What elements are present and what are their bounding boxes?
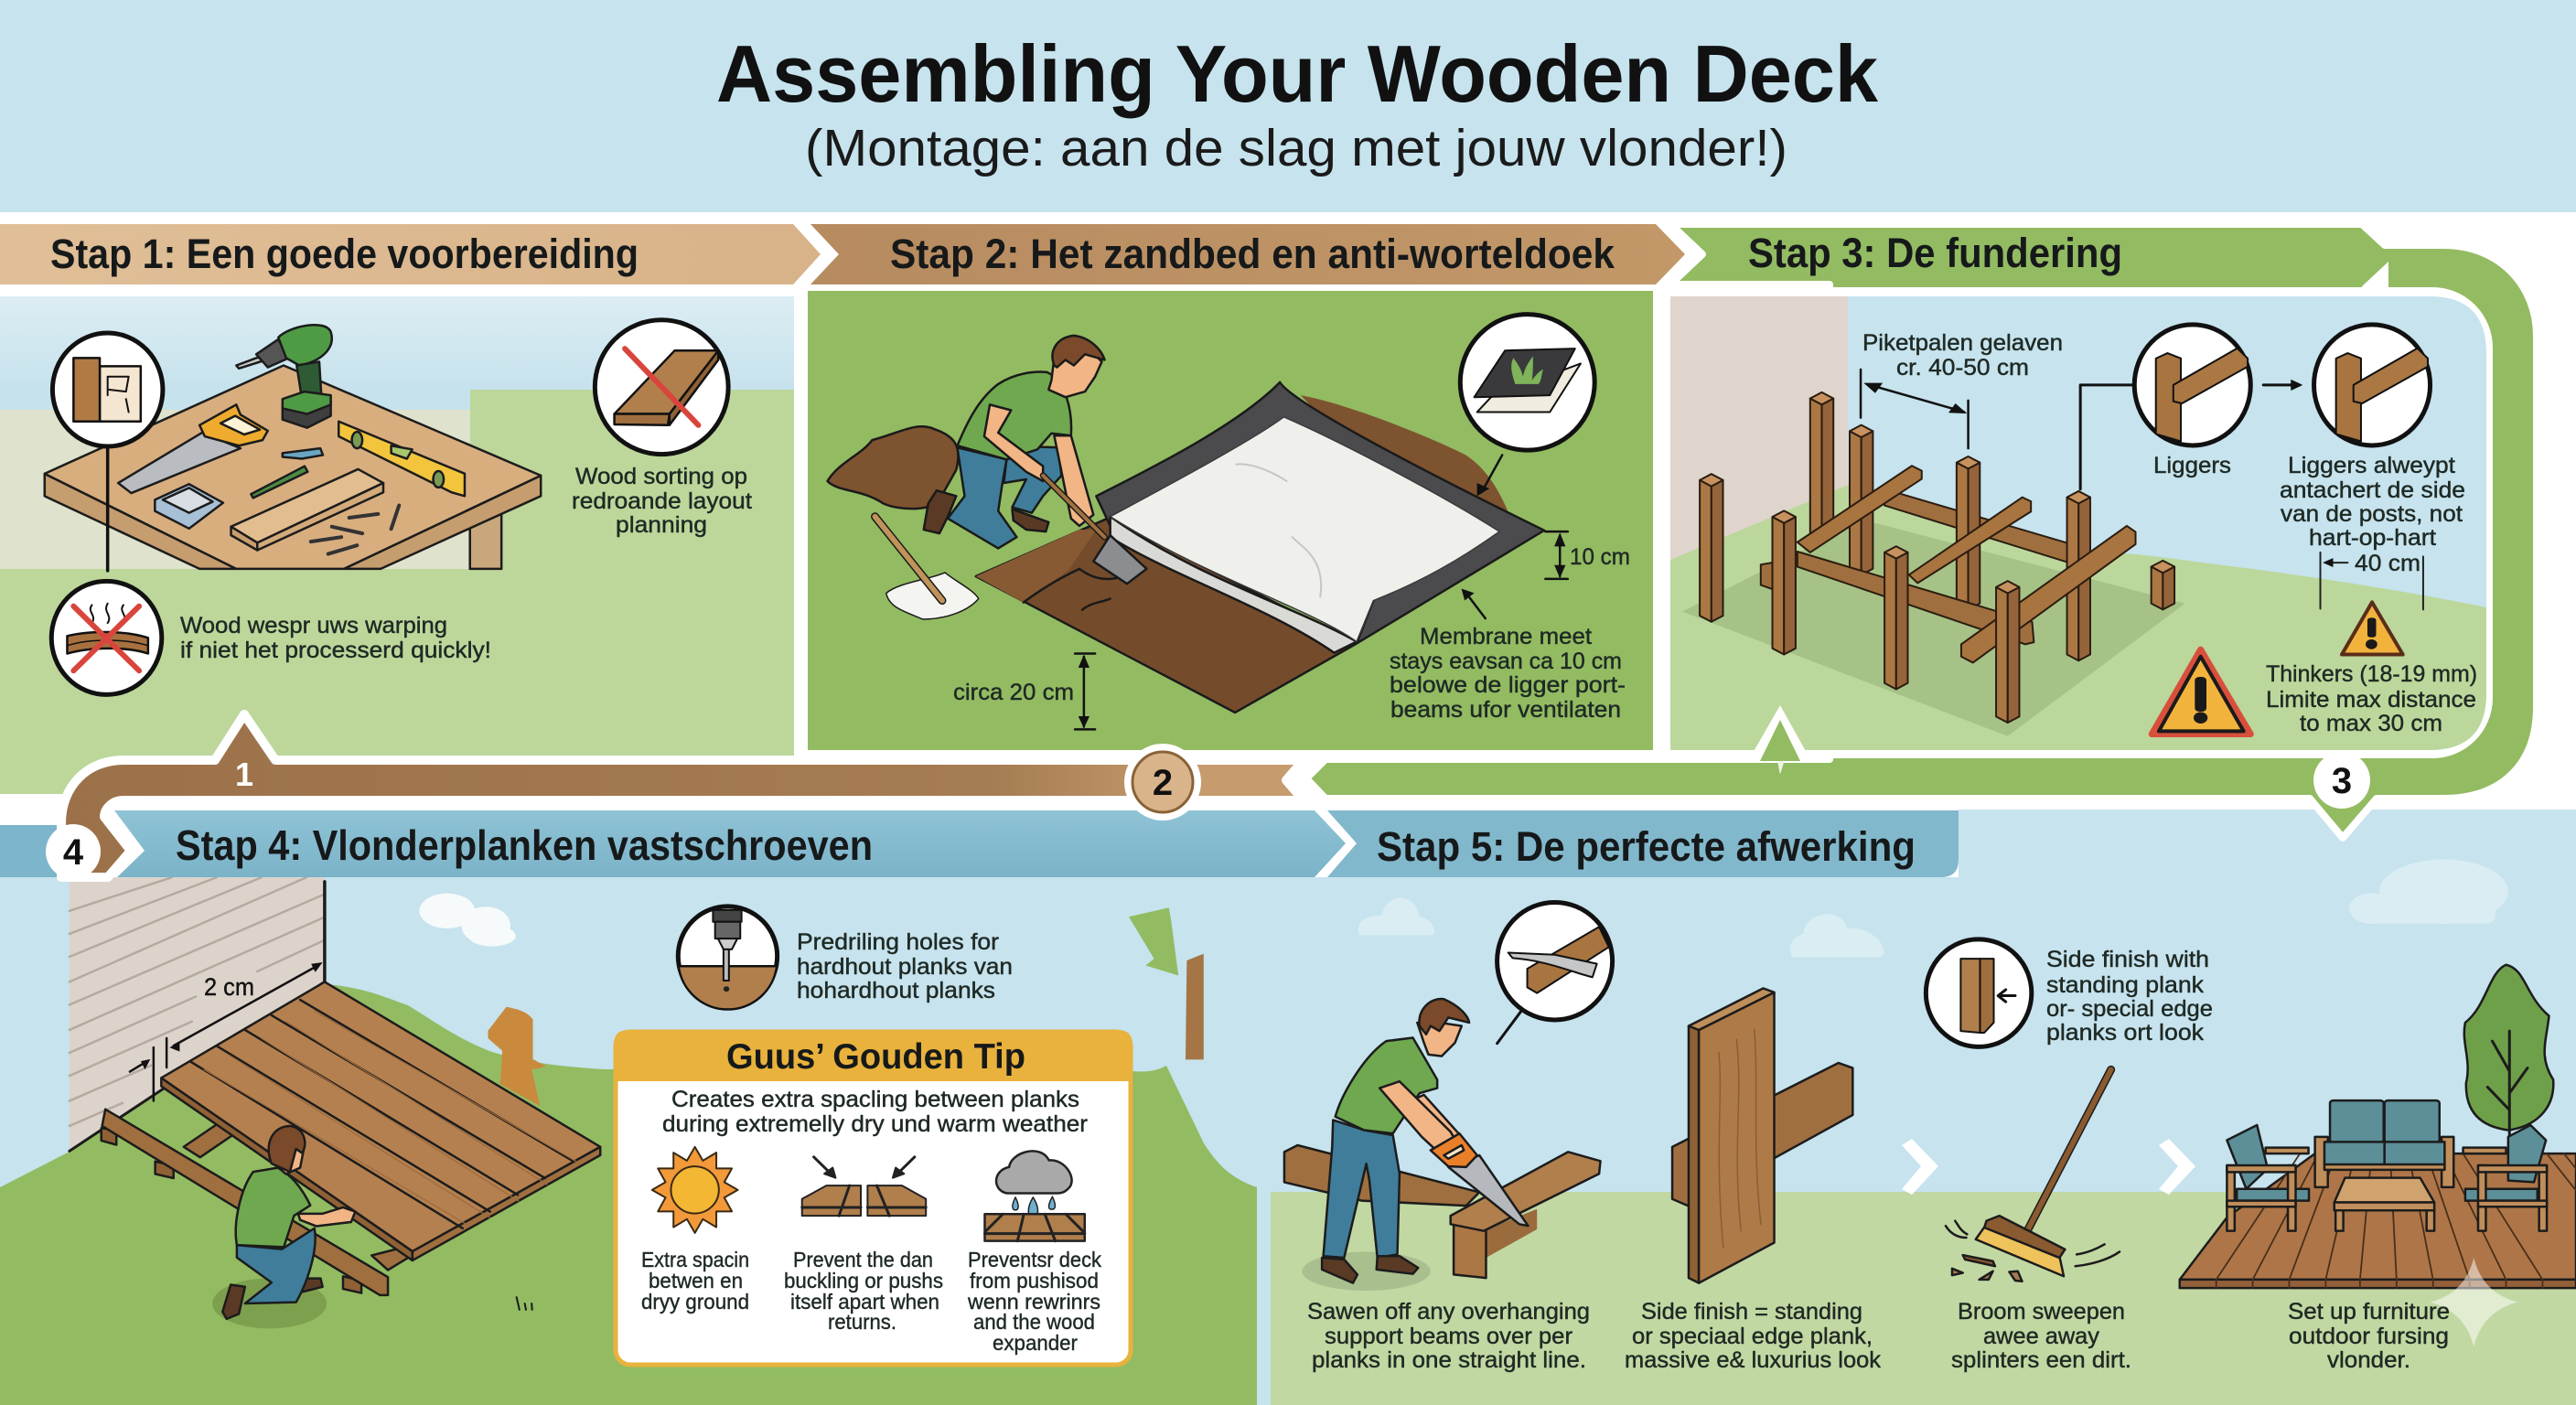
banner: step 1: Stap 1: Een goede voorbereiding — [50, 231, 639, 277]
label: thinkers note — [2266, 661, 2477, 736]
label: circa 20 cm: circa 20 cm — [953, 680, 1074, 705]
column text: sun: Extra spacin — [641, 1248, 749, 1271]
drill — [236, 325, 332, 428]
label: beams side attachment: van de posts, not — [2281, 501, 2463, 527]
banner: step 2: Stap 2: Het zandbed en anti-worteldoek — [890, 231, 1615, 277]
label: sawing: support beams over per — [1325, 1324, 1572, 1349]
label: thinkers note: to max 30 cm — [2300, 711, 2442, 736]
label: warping warning — [180, 613, 491, 663]
label: membrane note: beams ufor ventilaten — [1390, 697, 1621, 723]
label: 2 cm: 2 cm — [204, 973, 254, 1001]
column text: rain: and the wood — [973, 1310, 1095, 1334]
icon: crossed-out plank — [595, 320, 728, 455]
icon: large warning triangle — [2152, 649, 2250, 735]
icons: beam attachment details — [2080, 325, 2431, 489]
label: beams side attachment — [2280, 453, 2465, 576]
house wall — [70, 877, 325, 1151]
number badge 4: 4 — [63, 832, 84, 873]
icon: saw cut detail — [1497, 902, 1613, 1044]
cloud — [419, 894, 516, 947]
banner: step 5: Stap 5: De perfecte afwerking — [1377, 823, 1916, 870]
label: beams side attachment: hart-op-hart — [2309, 525, 2436, 551]
joists — [184, 1121, 237, 1157]
screws — [311, 506, 399, 554]
label: beams side attachment: Liggers alweypt — [2288, 453, 2455, 478]
wood strip — [231, 469, 383, 542]
column text: planks — [784, 1248, 943, 1334]
right chair — [2463, 1125, 2547, 1231]
label: wood sorting: planning — [616, 512, 707, 538]
post — [1700, 474, 1723, 622]
number badge 3: 3 — [2332, 761, 2352, 801]
icon: sun — [652, 1147, 737, 1233]
icon: small warning triangle — [2342, 602, 2403, 655]
column text: sun: dryy ground — [641, 1290, 749, 1314]
label: post spacing: Piketpalen gelaven — [1862, 330, 2063, 356]
label: 10 cm: 10 cm — [1570, 544, 1630, 570]
banner: step 1 — [0, 224, 821, 284]
dimension: post spacing — [1861, 370, 1969, 448]
banner: step 4 — [114, 810, 1346, 877]
label: warping warning: if niet het processerd quickly! — [180, 638, 491, 663]
label: broom: Broom sweepen — [1958, 1299, 2125, 1325]
column text: planks: Prevent the dan — [793, 1248, 933, 1271]
saw — [118, 404, 268, 493]
banner and connector: step 3 green loop — [1306, 224, 2537, 838]
icon: side finish — [1926, 939, 2032, 1046]
label: furniture — [2288, 1299, 2450, 1373]
number badge 2: 2 — [1153, 763, 1173, 803]
label: furniture: outdoor fursing — [2289, 1324, 2449, 1349]
label: membrane note: belowe de ligger port- — [1390, 672, 1626, 698]
background tree fragment — [1129, 907, 1204, 1059]
label: thinkers note: Thinkers (18-19 mm) — [2266, 661, 2477, 687]
label: thinkers note: Limite max distance — [2266, 687, 2476, 713]
sparkle decoration — [2430, 1258, 2517, 1346]
panel: step 1 preparation — [0, 296, 794, 794]
panel: step 3 foundation — [1670, 296, 2486, 750]
dimension: 40 cm — [2321, 552, 2423, 609]
title — [716, 28, 1879, 177]
left chair — [2227, 1125, 2309, 1231]
card intro: during extremelly dry und warm weather — [662, 1111, 1088, 1137]
label: wood sorting: Wood sorting op — [575, 464, 747, 489]
label: warping warning: Wood wespr uws warping — [180, 613, 447, 638]
label: side finish look: massive e& luxurius look — [1625, 1347, 1881, 1373]
up arrow on green connector — [1748, 705, 1811, 773]
subtitle: (Montage: aan de slag met jouw vlonder!) — [805, 119, 1787, 177]
worker — [212, 1126, 355, 1328]
label: side finish look — [1625, 1299, 1881, 1373]
column text: planks: buckling or pushs — [784, 1269, 943, 1292]
label: post spacing — [1862, 330, 2063, 381]
label: predrilling: hohardhout planks — [797, 978, 995, 1003]
icon: planks pushing together — [802, 1157, 926, 1216]
number badge 3 — [2313, 752, 2370, 809]
icon: rain on deck — [984, 1151, 1085, 1241]
card intro — [662, 1087, 1088, 1137]
illustration: kneeling worker with shovel — [827, 336, 1146, 619]
label: sawing: Sawen off any overhanging — [1307, 1299, 1590, 1325]
label: liggers: Liggers — [2153, 453, 2231, 478]
column text: rain: from pushisod — [970, 1269, 1099, 1292]
label: beams side attachment: 40 cm — [2355, 551, 2420, 576]
label: beams side attachment: antachert de side — [2280, 477, 2465, 503]
label: side finish: standing plank — [2046, 972, 2205, 998]
icon: warped wood warning — [51, 581, 162, 694]
label: side finish: planks ort look — [2046, 1020, 2205, 1046]
label: predrilling — [797, 929, 1013, 1003]
icon: predrilling — [678, 906, 778, 1010]
illustration: edge plank on beam — [1672, 988, 1852, 1283]
card intro: Creates extra spacling between planks — [671, 1087, 1079, 1112]
label: membrane note: Membrane meet — [1420, 624, 1592, 649]
label: side finish look: Side finish = standing — [1641, 1299, 1862, 1325]
illustration: posts and beams frame — [1682, 392, 2185, 736]
card heading: Guus’ Gouden Tip — [726, 1037, 1025, 1077]
column text: planks: returns. — [828, 1310, 896, 1334]
sofa — [2315, 1100, 2453, 1187]
dimension: 2 cm gap — [130, 962, 323, 1101]
number badge 4 — [46, 824, 101, 879]
label: predrilling: Predriling holes for — [797, 929, 999, 955]
label: side finish look: or speciaal edge plank, — [1632, 1324, 1873, 1349]
label: furniture: Set up furniture — [2288, 1299, 2450, 1325]
lawn — [0, 984, 1257, 1405]
panel: step 2 sand bed — [808, 291, 1653, 750]
icon: anti-root membrane — [1460, 315, 1594, 450]
deck surface — [2180, 1153, 2576, 1280]
label: broom: awee away — [1983, 1324, 2100, 1349]
label: side finish: Side finish with — [2046, 947, 2209, 972]
column text: sun — [641, 1248, 749, 1314]
label: side finish: or- special edge — [2046, 996, 2213, 1022]
label: broom — [1951, 1299, 2131, 1373]
dimension arrows — [1075, 455, 1568, 729]
clouds — [1358, 859, 2508, 957]
callout: golden tip card — [614, 1030, 1132, 1365]
icon: sorting wood and layout plan — [52, 333, 163, 571]
panel: step 4 decking — [0, 877, 1257, 1405]
column text: rain — [967, 1248, 1101, 1355]
banner: step 5 — [1327, 810, 1959, 877]
column text: sun: betwen en — [649, 1269, 743, 1292]
step separator chevrons — [1902, 1139, 2195, 1195]
illustration: workbench with tools — [45, 325, 541, 569]
label: predrilling: hardhout planks van — [797, 954, 1013, 980]
column text: rain: Preventsr deck — [968, 1248, 1101, 1271]
label: wood sorting: redroande layout — [572, 488, 752, 514]
banner: step 4: Stap 4: Vlonderplanken vastschroeven — [176, 821, 873, 869]
box of screws — [155, 484, 223, 529]
deck boards — [161, 1078, 413, 1260]
number badge 2 — [1124, 744, 1201, 820]
label: wood sorting — [572, 464, 752, 538]
label: broom: splinters een dirt. — [1951, 1347, 2131, 1373]
banner: step 2 — [810, 224, 1685, 284]
coffee table — [2334, 1178, 2434, 1231]
spirit level — [338, 422, 465, 496]
column text: rain: wenn rewrinrs — [967, 1290, 1100, 1314]
illustration: broom — [1946, 1069, 2120, 1282]
label: membrane note — [1390, 624, 1626, 723]
label: sawing — [1307, 1299, 1590, 1373]
illustration: excavation with membrane and sand — [976, 382, 1544, 713]
illustration: deck and worker — [70, 877, 600, 1328]
panel: step 5 finishing — [1271, 859, 2576, 1405]
title: Assembling Your Wooden Deck — [716, 28, 1879, 119]
banner: step 4 left strip — [0, 825, 82, 877]
label: side finish — [2046, 947, 2213, 1046]
column text: planks: itself apart when — [790, 1290, 939, 1314]
stump-shaped post — [488, 1007, 546, 1106]
connector: brown loop from step 1 to step 4 — [61, 714, 1304, 877]
illustration: finished deck with furniture and tree — [2180, 965, 2576, 1288]
label: furniture: vlonder. — [2327, 1347, 2410, 1373]
number 1: 1 — [235, 756, 253, 793]
label: sawing: planks in one straight line. — [1312, 1347, 1586, 1373]
panel 5 upper sky strip — [1959, 810, 2576, 883]
label: membrane note: stays eavsan ca 10 cm — [1390, 649, 1622, 674]
pencil and bit — [251, 467, 307, 498]
illustration: sawing worker — [1284, 999, 1601, 1291]
label: post spacing: cr. 40-50 cm — [1896, 355, 2029, 381]
column text: rain: expander — [993, 1331, 1078, 1355]
banner and connector: step 3 green loop: Stap 3: De fundering — [1748, 230, 2122, 276]
